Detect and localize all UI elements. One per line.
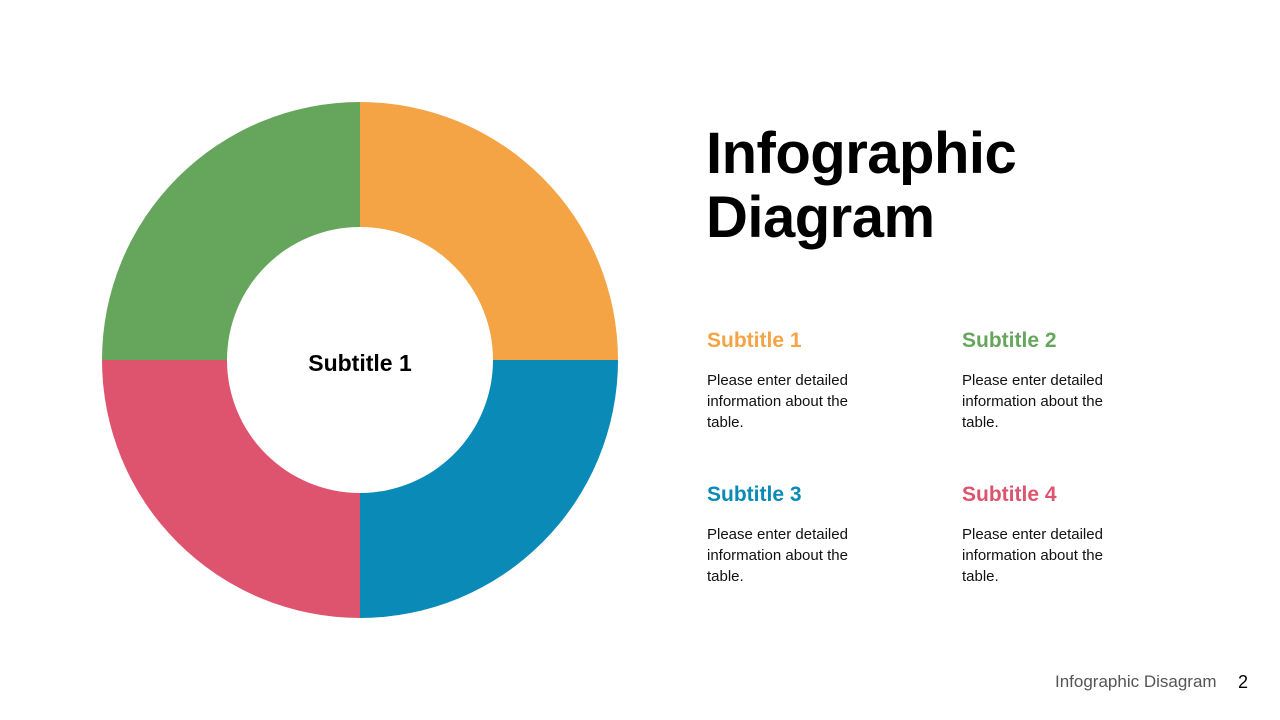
item: subtitle 4: [962, 483, 1103, 585]
item: subtitle 2: [962, 329, 1103, 431]
item: subtitle 2: Please enter detailed information about the table.: [962, 372, 1103, 431]
title: [706, 121, 1016, 250]
item: subtitle 4: Subtitle 4: [962, 483, 1057, 506]
item: subtitle 2: Subtitle 2: [962, 329, 1057, 352]
item: subtitle 1: Please enter detailed information about the table.: [707, 372, 848, 431]
item: subtitle 3: Please enter detailed information about the table.: [707, 526, 848, 585]
item: subtitle 3: Subtitle 3: [707, 483, 802, 506]
title: Diagram: [706, 185, 935, 250]
donut chart: [102, 102, 618, 618]
item: subtitle 1: [707, 329, 848, 431]
segment: orange: [360, 102, 618, 360]
item: subtitle 1: Subtitle 1: [707, 329, 802, 352]
segment: red: [102, 360, 360, 618]
item: subtitle 4: Please enter detailed information about the table.: [962, 526, 1103, 585]
segment: blue: [360, 360, 618, 618]
center label: Subtitle 1: [308, 350, 412, 376]
footer: Infographic Disagram: [1055, 672, 1217, 691]
title: Infographic: [706, 121, 1016, 186]
item: subtitle 3: [707, 483, 848, 585]
segment: green: [102, 102, 360, 360]
page number: 2: [1238, 672, 1248, 692]
